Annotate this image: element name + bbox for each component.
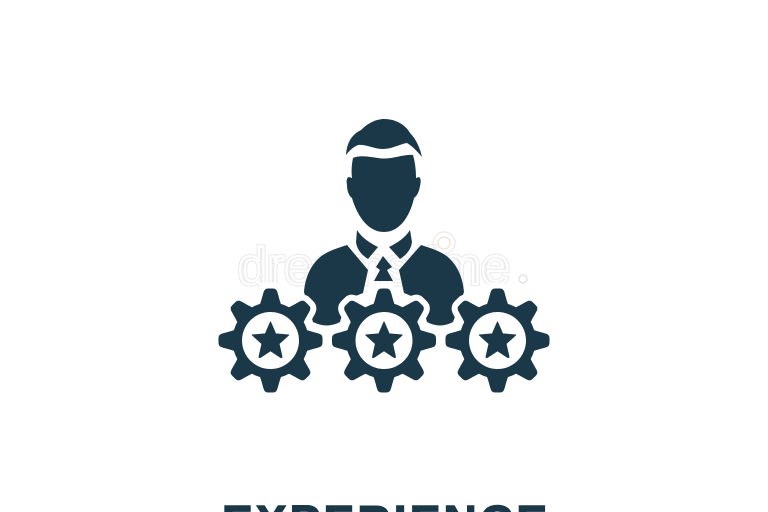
tie	[374, 256, 393, 281]
watermark: dreamstime	[238, 238, 510, 296]
gear: left with star	[218, 288, 322, 392]
right shoulder	[399, 245, 464, 326]
left collar	[356, 230, 378, 259]
right collar	[389, 230, 412, 259]
left shoulder	[304, 245, 368, 326]
watermark: dreamstime	[238, 238, 510, 296]
figure: businessman	[304, 119, 464, 326]
hair	[346, 119, 422, 157]
gear: centre with star	[332, 288, 436, 392]
gear: right with star	[446, 288, 550, 392]
face	[347, 155, 421, 232]
